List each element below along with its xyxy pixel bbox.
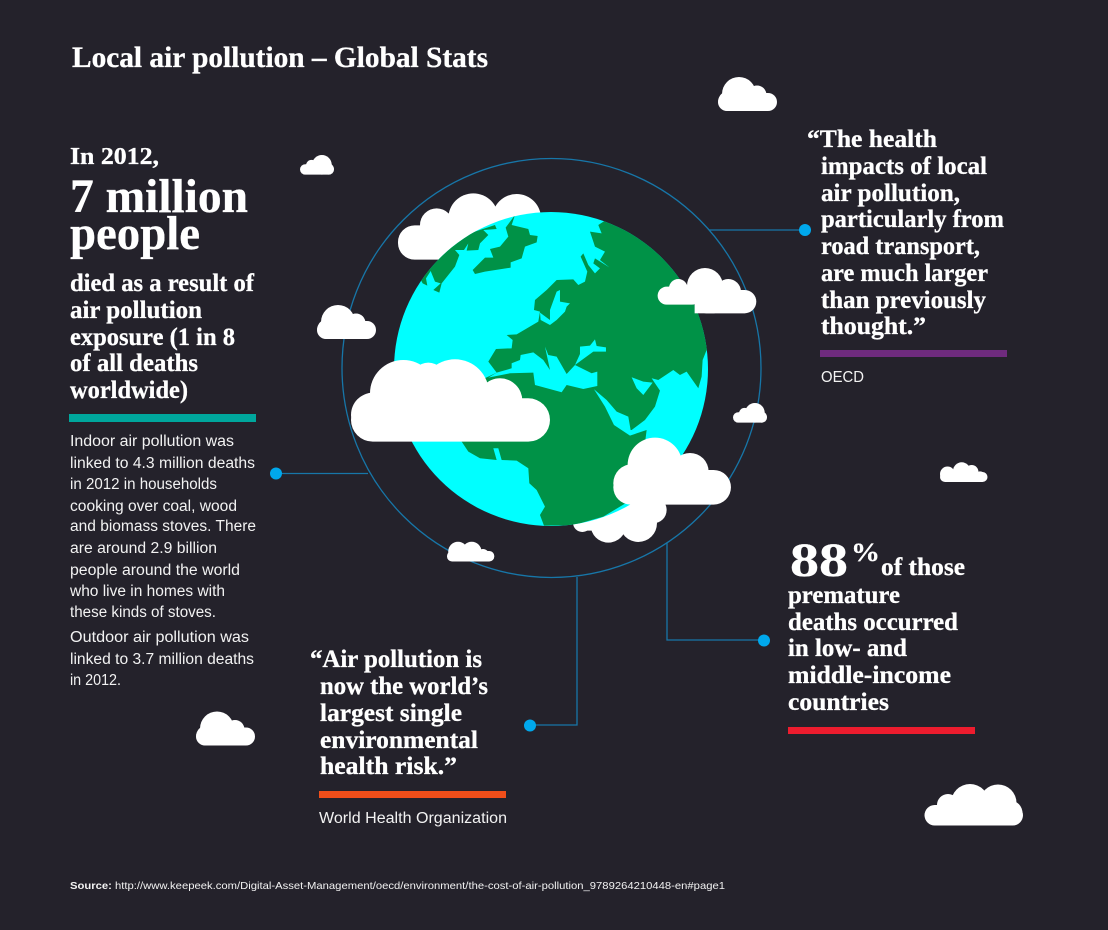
small cloud: ring left: [317, 305, 376, 339]
WHO quote: health risk.”: [320, 751, 457, 780]
88 percent statistic: [788, 534, 965, 716]
headline: 7 million people: air pollution: [70, 295, 202, 324]
body text: indoor and outdoor deaths: Outdoor air pollution was: [70, 629, 249, 646]
OECD quote: impacts of local: [821, 151, 987, 180]
red bar: [788, 727, 975, 734]
OECD quote: road transport,: [821, 231, 980, 260]
cloud behind globe: top left: [398, 193, 541, 260]
body text: indoor and outdoor deaths: Indoor air pollution was: [70, 433, 234, 450]
body text: indoor and outdoor deaths: [69, 433, 256, 689]
headline: 7 million people: exposure (1 in 8: [70, 322, 235, 351]
title: Local air pollution – Global Stats: [72, 41, 488, 74]
cloud: lower left: [196, 712, 255, 746]
WHO quote: [310, 644, 488, 780]
headline: 7 million people: [70, 144, 254, 404]
WHO quote: largest single: [320, 698, 462, 727]
cloud over globe: right: [658, 268, 756, 313]
cloud: top right: [718, 77, 777, 111]
OECD quote: are much larger: [821, 258, 988, 287]
body text: indoor and outdoor deaths: in 2012.: [70, 672, 121, 689]
body text: indoor and outdoor deaths: cooking over coal, wood: [70, 498, 237, 515]
OECD quote: air pollution,: [821, 178, 960, 207]
connector dots: [270, 224, 811, 732]
88 percent statistic: %: [851, 538, 880, 567]
88 percent statistic: 88: [790, 534, 848, 587]
landmass: Eurasia and Africa: [462, 221, 707, 526]
orange bar: [319, 791, 506, 798]
large cloud over globe: [351, 359, 550, 442]
body text: indoor and outdoor deaths: these kinds of stoves.: [70, 604, 216, 621]
cloud behind globe: bottom: [573, 497, 667, 543]
small cloud: ring right: [733, 403, 767, 423]
WHO quote: environmental: [320, 725, 478, 754]
small cloud: ring bottom: [447, 542, 494, 562]
OECD quote: than previously: [821, 285, 986, 314]
cloud: lower right: [924, 784, 1023, 826]
88 percent statistic: of those: [881, 552, 965, 581]
cloud over globe: lower right: [613, 438, 731, 505]
body text: indoor and outdoor deaths: people around the world: [70, 562, 240, 579]
headline: 7 million people: people: [70, 207, 200, 260]
cloud: top left small: [300, 155, 334, 175]
body text: indoor and outdoor deaths: linked to 4.3 million deaths: [70, 455, 255, 472]
WHO attribution: World Health Organization: [319, 810, 507, 827]
88 percent statistic: premature: [788, 580, 900, 609]
body text: indoor and outdoor deaths: and biomass stoves. There: [70, 518, 256, 535]
seas: [488, 290, 653, 436]
OECD quote: “The health: [807, 124, 937, 153]
body text: indoor and outdoor deaths: who live in homes with: [69, 583, 225, 600]
headline: 7 million people: of all deaths: [70, 348, 198, 377]
WHO quote: now the world’s: [320, 671, 488, 700]
headline: 7 million people: 7 million: [70, 170, 248, 223]
globe: [394, 212, 723, 526]
WHO quote: “Air pollution is: [310, 644, 482, 673]
OECD quote: [807, 124, 1004, 340]
OECD quote: particularly from: [821, 204, 1004, 233]
body text: indoor and outdoor deaths: in 2012 in households: [70, 476, 217, 493]
body text: indoor and outdoor deaths: linked to 3.7 million deaths: [70, 651, 254, 668]
body text: indoor and outdoor deaths: are around 2.9 billion: [70, 540, 217, 557]
connector lines and orbit ring: [276, 158, 805, 725]
cloud: right middle: [940, 462, 988, 482]
88 percent statistic: in low- and: [788, 633, 907, 662]
source line: Source: http://www.keepeek.com/Digital-Asset-Management/oecd/environment/the-cost-of-air-pollution_9789264210448-en#page1: [70, 880, 725, 892]
OECD attribution: OECD: [821, 369, 864, 386]
headline: 7 million people: In 2012,: [70, 144, 159, 170]
OECD quote: thought.”: [821, 311, 926, 340]
teal bar: [69, 414, 256, 422]
purple bar: [820, 350, 1007, 357]
islands: Iceland, Greenland and UK side: [420, 215, 538, 293]
headline: 7 million people: died as a result of: [70, 268, 254, 297]
headline: 7 million people: worldwide): [70, 375, 188, 404]
88 percent statistic: countries: [788, 687, 889, 716]
88 percent statistic: deaths occurred: [788, 607, 958, 636]
88 percent statistic: middle-income: [788, 660, 951, 689]
